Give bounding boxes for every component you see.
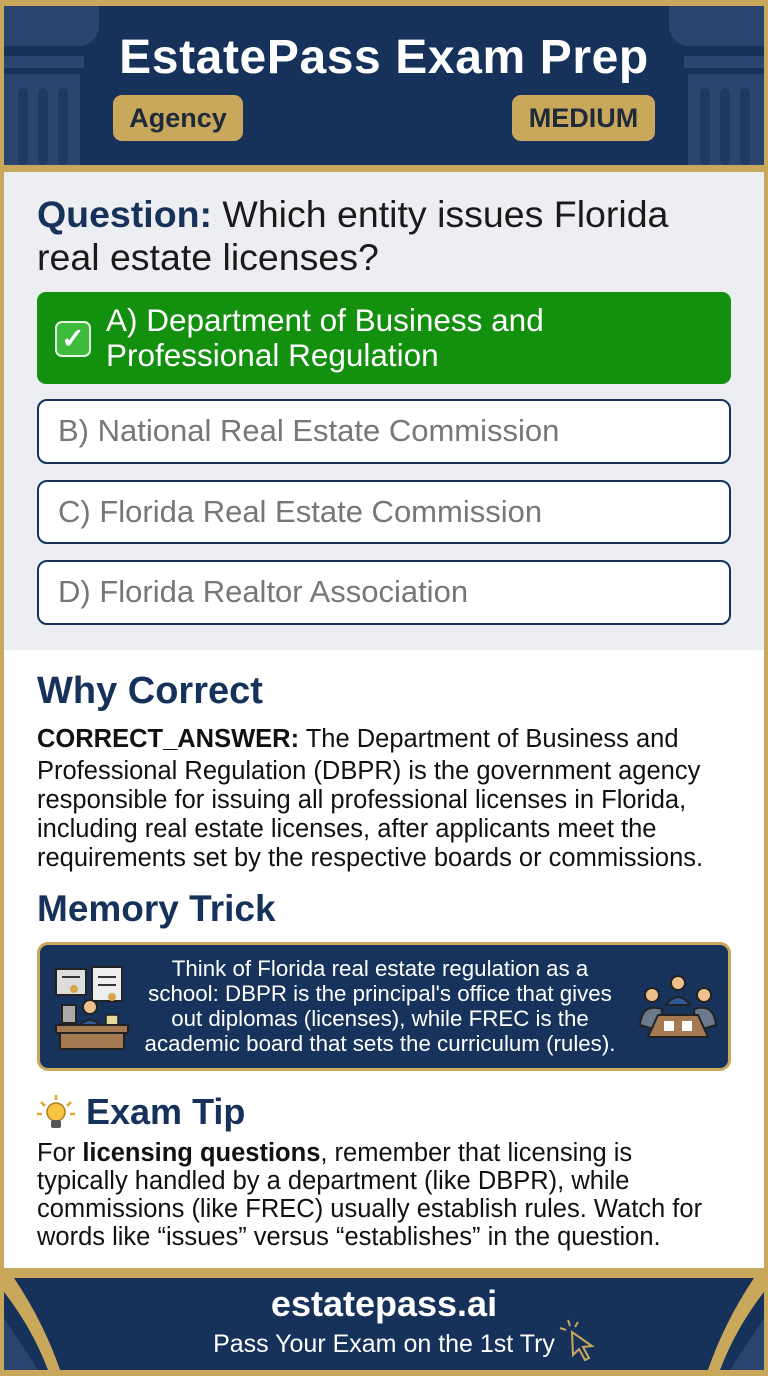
option C <box>37 480 731 544</box>
icon: light bulb <box>37 1095 75 1128</box>
option C: C) Florida Real Estate Commission <box>58 494 542 529</box>
badge: difficulty: MEDIUM <box>529 103 638 133</box>
option A correct <box>37 292 731 384</box>
text: explanation: CORRECT_ANSWER: The Department of Business and <box>37 725 679 753</box>
option B <box>37 399 731 464</box>
option B: B) National Real Estate Commission <box>58 413 559 448</box>
heading: exam tip: Exam Tip <box>86 1091 245 1132</box>
callout: memory trick <box>37 942 731 1071</box>
panel: body <box>4 650 764 1268</box>
icon: right column <box>669 6 764 165</box>
text: explanation <box>37 725 703 872</box>
text: explanation: responsible for issuing all professional licenses in Florida, <box>37 786 686 814</box>
text: explanation: including real estate licenses, after applicants meet the <box>37 815 656 843</box>
question text: Question: Which entity issues Florida <box>37 193 668 235</box>
text: memory trick: out diplomas (licenses), while FREC is the <box>171 1006 589 1031</box>
text: exam tip: typically handled by a department (like DBPR), while <box>37 1167 629 1195</box>
icon: cursor <box>560 1320 595 1362</box>
icon: boardroom <box>639 975 717 1038</box>
heading: why correct: Why Correct <box>37 670 263 712</box>
title: EstatePass Exam Prep <box>119 31 649 84</box>
icon: office desk <box>55 966 129 1050</box>
option D <box>37 560 731 625</box>
badge: difficulty <box>512 95 655 141</box>
text: memory trick: school: DBPR is the principal's office that gives <box>148 981 612 1006</box>
icon: check <box>55 321 91 357</box>
panel: question <box>4 172 764 650</box>
text: exam tip: commissions (like FREC) usually establish rules. Watch for <box>37 1195 702 1223</box>
text: exam tip <box>37 1139 702 1251</box>
badge: category: Agency <box>129 103 227 133</box>
text: explanation: Professional Regulation (DBPR) is the government agency <box>37 757 700 785</box>
heading: memory trick: Memory Trick <box>37 888 276 929</box>
question text <box>37 193 668 278</box>
header <box>4 6 764 165</box>
badge: category <box>113 95 243 141</box>
text: exam tip: For licensing questions, remember that licensing is <box>37 1139 632 1167</box>
icon: left column <box>4 6 99 165</box>
option D: D) Florida Realtor Association <box>58 574 468 609</box>
text: memory trick: Think of Florida real estate regulation as a <box>172 956 588 981</box>
text: explanation: requirements set by the respective boards or commissions. <box>37 844 703 872</box>
question text: real estate licenses? <box>37 236 379 278</box>
brand: estatepass.ai <box>271 1283 497 1324</box>
decorative gold swoosh <box>4 1278 764 1370</box>
tagline: Pass Your Exam on the 1st Try <box>213 1330 555 1358</box>
option A correct: A) Department of Business and <box>106 302 544 338</box>
text: memory trick <box>145 956 615 1056</box>
option A correct: Professional Regulation <box>106 337 439 373</box>
text: exam tip: words like “issues” versus “establishes” in the question. <box>37 1223 661 1251</box>
icon: check: ✓ <box>61 323 85 354</box>
footer <box>4 1278 764 1370</box>
text: memory trick: academic board that sets the curriculum (rules). <box>145 1031 615 1056</box>
